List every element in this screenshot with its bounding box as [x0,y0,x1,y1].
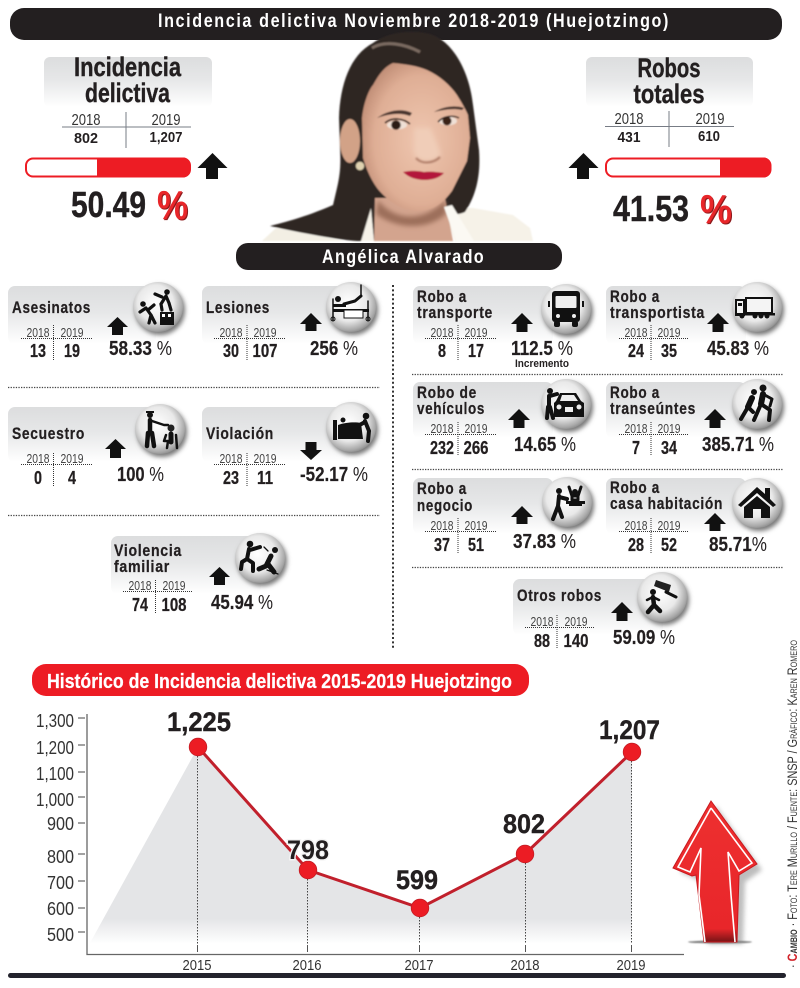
icon: truck [732,282,784,335]
card: Robo a transeúntes [606,379,784,458]
year table [619,518,689,555]
card: Violencia familiar [111,533,287,615]
year table [425,325,496,361]
percentage: 45.83 % [707,338,769,360]
year table: 88 [534,631,550,651]
year table: 1,207 [150,129,182,146]
icon: car theft [541,379,593,432]
year table [425,518,496,555]
year table: 7 [632,438,640,458]
icon: arrow [300,313,322,331]
value labels: 802 [503,809,545,839]
credit line: · Cambio · Foto: Tere Murillo / Fuente: SNSP / Gráfico: Karen Romero [785,640,800,968]
label: casa habitación [610,494,723,513]
year table [619,325,689,361]
label [417,287,493,322]
value labels: 599 [396,865,438,895]
year table: 2018 [128,578,152,593]
icon: arrow [511,313,533,332]
year table [619,421,689,458]
card: Robo a negocio [413,477,594,555]
x labels: 2016 [292,958,322,974]
icon: up arrow [568,153,598,179]
year table: 2019 [162,578,186,593]
area [90,747,632,943]
icon: kidnapping [135,404,187,457]
year table: 107 [252,341,278,361]
percentage: 85.71% [709,534,767,556]
year table: 2018 [624,518,648,533]
icon: bus [541,284,593,337]
earring [356,162,364,170]
card: Robo a transportista [606,282,784,361]
year table: 2019 [658,421,680,436]
percentage: % [700,186,732,232]
year table: 2018 [26,451,50,466]
y labels: 600 [47,898,74,919]
line chart [36,707,684,974]
year table: 23 [223,468,239,488]
year table: 802 [74,130,98,147]
percentage: 59.09 % [613,627,675,649]
label: Robo a [610,287,660,306]
percentage: 41.53 [613,188,689,229]
icon: assassination [133,282,185,335]
y labels: 900 [47,813,74,834]
divider [412,566,783,568]
year table: 35 [661,341,677,361]
panel: Incidencia delictiva [26,52,228,228]
year table [525,614,595,651]
card: Otros robos [513,572,689,651]
year table: 37 [434,535,450,555]
title bar [10,8,782,40]
year table: 2018 [614,111,644,128]
year table: 2019 [658,325,680,340]
name bar: Angélica Alvarado [322,247,485,268]
icon: mugging [732,379,784,432]
data points [189,738,641,917]
value labels: 1,207 [599,715,660,745]
card: Robo a casa habitación [606,478,784,556]
label: Lesiones [206,298,270,317]
year table: 2019 [564,614,588,629]
year table: 51 [468,535,484,555]
year table: 431 [618,129,640,146]
heading [74,52,182,108]
card: Lesiones [202,282,378,361]
year table [425,421,496,458]
percentage: 385.71 % [702,434,774,456]
year table: 140 [564,631,588,651]
label: Robo de [417,383,477,402]
value labels: 798 [287,835,329,865]
percentage: 100 % [117,464,164,486]
year table: 4 [68,468,76,488]
year table: 2018 [220,325,242,340]
icon: family violence [235,533,287,586]
percentage: 37.83 % [513,531,576,553]
year table: 2019 [658,518,680,533]
year table: 2019 [464,518,488,533]
icon: arrow [707,313,729,332]
year table: 108 [162,595,186,615]
icon: arrow [611,602,633,621]
year table: 2019 [696,111,724,128]
label: Robo a [417,287,467,306]
year table: 30 [223,341,239,361]
y labels: 1,100 [36,763,74,784]
icon: down arrow [300,442,322,460]
y labels: 800 [47,846,74,867]
year table: 19 [64,341,80,361]
label [417,383,485,418]
y labels: 500 [47,924,74,945]
year table: 2019 [254,451,276,466]
percentage: 45.94 % [211,592,273,614]
icon: house [732,478,784,531]
icon: arrow [704,409,726,428]
label: Violencia [114,541,182,560]
y labels: 1,000 [36,789,74,810]
label: vehículos [417,399,485,418]
icon: arrow [511,506,533,524]
icon: arrow [508,409,530,428]
divider [8,386,380,388]
year table: 2019 [60,325,84,340]
vertical divider [392,285,394,649]
big red arrow [673,801,762,944]
bottom rule [8,973,786,978]
chart heading [32,664,529,696]
icon: hospital bed [326,282,378,335]
year table: 266 [464,438,488,458]
year table: 2018 [530,614,554,629]
icon: arrow [105,439,126,458]
label: transeúntes [610,399,696,418]
icon: arrow [209,567,230,585]
year table [21,451,92,488]
icon: arrow [107,317,128,335]
year table: 2018 [430,518,454,533]
icon: assault [326,402,378,455]
value labels: 1,225 [167,707,231,737]
year table: 232 [430,438,454,458]
heading: Robos [638,53,700,83]
year table [214,325,285,361]
card: Asesinatos [8,282,185,361]
x labels: 2017 [404,958,434,974]
year table: 2018 [220,451,242,466]
label: Violación [206,424,274,443]
heading: delictiva [85,78,171,108]
y labels: 1,300 [36,710,74,731]
label: familiar [114,557,170,576]
heading box [586,57,753,107]
progress bar [606,158,771,178]
year table: 34 [661,438,677,458]
year table: 2018 [430,421,454,436]
note: Incremento [515,358,569,370]
year table: 17 [468,341,484,361]
icon: up arrow [198,153,228,179]
year table [123,578,193,615]
axes [87,714,684,954]
year table: 2018 [430,325,454,340]
divider [412,468,783,470]
title bar: Incidencia delictiva Noviembre 2018-2019 (Huejotzingo) [158,10,670,32]
year table [214,451,285,488]
x labels: 2015 [182,958,212,974]
card: Secuestro [8,404,187,488]
x labels [182,958,646,974]
percentage: 58.33 % [109,338,172,360]
portrait: Angélica Alvarado [262,32,533,241]
label: Robo a [610,383,660,402]
icon: camera and thief [637,572,689,625]
label [610,383,696,418]
year table: 24 [628,341,644,361]
year table: 2018 [26,325,50,340]
value labels [167,707,660,895]
drop lines [198,756,632,944]
label: transporte [417,303,493,322]
name bar [236,243,562,270]
divider [8,514,380,516]
card: Violación [202,402,378,488]
percentage [71,182,188,228]
card: Robo a transporte [413,284,593,370]
year table: 2018 [72,112,100,129]
percentage: % [157,182,188,228]
chart heading: Histórico de Incidencia delictiva 2015-2019 Huejotzingo [47,670,512,693]
percentage: 112.5 % [511,338,573,360]
year table: 2019 [60,451,84,466]
label: Asesinatos [12,298,91,317]
heading: totales [634,79,704,109]
percentage: -52.17 % [300,464,368,486]
year table: 2019 [464,421,488,436]
line [198,747,632,908]
year table: 2019 [254,325,276,340]
label: Robo a [417,479,467,498]
label: Secuestro [12,424,85,443]
x ticks [198,945,632,952]
percentage: 14.65 % [514,434,576,456]
y labels [36,710,85,945]
year table: 13 [30,341,46,361]
label: negocio [417,496,473,515]
icon: shop robbery [542,477,594,530]
label: Robo a [610,478,660,497]
label [417,479,473,515]
percentage: 256 % [310,338,358,360]
year table: 2019 [464,325,488,340]
heading [634,53,704,109]
panel: Robos totales [568,53,771,232]
heading box [44,57,212,107]
year table: 0 [34,468,42,488]
year table: 2018 [624,325,648,340]
y labels: 1,200 [36,737,74,758]
card: Robo de vehículos [413,379,593,458]
x labels: 2018 [510,958,540,974]
year table [21,325,92,361]
label: Otros robos [517,586,602,605]
percentage: 50.49 [71,184,146,225]
label [610,287,705,322]
percentage [613,186,732,232]
year table: 2018 [624,421,648,436]
icon: arrow [704,513,726,531]
year table: 28 [628,535,644,555]
label [610,478,723,513]
divider [412,374,783,376]
year table [62,112,191,148]
year table [605,111,734,147]
label [114,541,182,576]
year table: 74 [132,595,148,615]
year table: 8 [438,341,446,361]
x labels: 2019 [616,958,646,974]
year table: 11 [257,468,273,488]
year table: 2019 [152,112,180,129]
y labels: 700 [47,872,74,893]
year table: 52 [661,535,677,555]
progress bar [26,158,190,178]
year table: 610 [698,128,720,145]
label: transportista [610,303,705,322]
heading: Incidencia [74,52,182,82]
